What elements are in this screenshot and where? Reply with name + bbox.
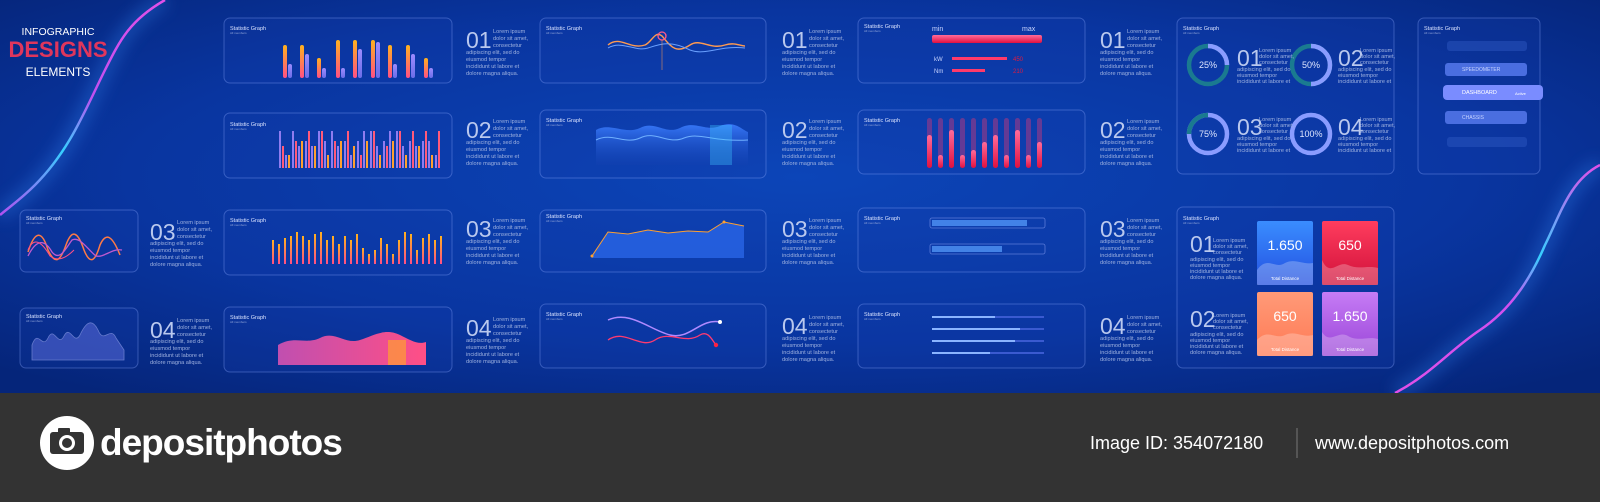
text block B4: incididunt ut labore et	[466, 352, 520, 358]
panel E1: donut charts: incididunt ut labore et	[1338, 148, 1392, 154]
panel A3: line chart: Statistic Graph	[26, 216, 62, 222]
panel D1: min/max bars: max	[1022, 26, 1036, 33]
panel E2: metric cards: dolore magna aliqua.	[1190, 275, 1243, 281]
panel F1: menu: All members	[1424, 31, 1441, 35]
panel C3: area line chart: All members	[546, 219, 563, 223]
text block A3: eiusmod tempor	[150, 248, 190, 254]
text block D2	[1100, 117, 1163, 167]
panel B4: pink area chart	[224, 307, 452, 372]
panel E2: metric cards: 02	[1190, 306, 1216, 332]
panel F1: menu	[1418, 18, 1543, 174]
footer logo: depositphotos	[100, 422, 342, 463]
panel B2: dense bar chart: All members	[230, 127, 247, 131]
text block B4: dolor sit amet,	[493, 324, 529, 330]
panel E2: metric cards: dolor sit amet,	[1213, 244, 1249, 250]
text block B1: dolore magna aliqua.	[466, 71, 519, 77]
text block C4: dolor sit amet,	[809, 322, 845, 328]
text block C1: 01	[782, 27, 808, 53]
panel E2: metric cards: incididunt ut labore et	[1190, 269, 1244, 275]
text block D1: incididunt ut labore et	[1100, 64, 1154, 70]
text block A4: adipiscing elit, sed do	[150, 339, 204, 345]
text block D1: 01	[1100, 27, 1126, 53]
text block D4: adipiscing elit, sed do	[1100, 336, 1154, 342]
text block C3: Lorem ipsum	[809, 218, 842, 224]
text block C4: consectetur	[809, 329, 838, 335]
panel E1: donut charts: adipiscing elit, sed do	[1237, 67, 1290, 73]
text block D2: eiusmod tempor	[1100, 147, 1140, 153]
panel E1: donut charts: eiusmod tempor	[1237, 142, 1277, 148]
text block B4: Lorem ipsum	[493, 317, 526, 323]
text block B1: consectetur	[493, 43, 522, 49]
panel E1: donut charts: incididunt ut labore et	[1237, 79, 1291, 85]
panel B2: dense bar chart	[224, 113, 452, 178]
panel B1: grouped bar chart: Statistic Graph	[230, 26, 266, 32]
panel E1: donut charts: dolor sit amet,	[1360, 123, 1396, 129]
text block C3: 03	[782, 216, 808, 242]
text block C2: adipiscing elit, sed do	[782, 140, 836, 146]
footer bar	[0, 393, 1600, 502]
panel E2: metric cards: 650	[1273, 308, 1297, 324]
text block C1: Lorem ipsum	[809, 29, 842, 35]
panel E2: metric cards: 1.650	[1332, 308, 1368, 324]
panel B3: thin bar chart: All members	[230, 223, 247, 227]
panel E1: donut charts: adipiscing elit, sed do	[1338, 136, 1392, 142]
text block D3: eiusmod tempor	[1100, 246, 1140, 252]
text block D4: eiusmod tempor	[1100, 343, 1140, 349]
panel E1: donut charts: eiusmod tempor	[1338, 73, 1378, 79]
text block C4: dolore magna aliqua.	[782, 357, 835, 363]
panel B1: grouped bar chart: All members	[230, 31, 247, 35]
panel B4: pink area chart: All members	[230, 320, 247, 324]
right wave	[1395, 165, 1600, 393]
panel E1: donut charts: 100%	[1299, 129, 1323, 139]
text block B3: incididunt ut labore et	[466, 253, 520, 259]
text block C3: eiusmod tempor	[782, 246, 822, 252]
text block C4: Lorem ipsum	[809, 315, 842, 321]
panel E2: metric cards: Total Distance	[1271, 276, 1300, 281]
panel D1: min/max bars: All members	[864, 29, 881, 33]
panel E1: donut charts: consectetur	[1360, 129, 1389, 135]
panel D3: progress bars: Statistic Graph	[864, 216, 900, 222]
text block C1: dolore magna aliqua.	[782, 71, 835, 77]
text block C2	[782, 117, 845, 167]
panel E1: donut charts: 03	[1237, 114, 1263, 140]
title: ELEMENTS	[26, 65, 90, 79]
panel E1: donut charts: consectetur	[1259, 60, 1288, 66]
text block D2: dolor sit amet,	[1127, 126, 1163, 132]
panel E1: donut charts: Lorem ipsum	[1360, 117, 1393, 123]
text block B1: dolor sit amet,	[493, 36, 529, 42]
panel D1: min/max bars: min	[932, 26, 943, 33]
text block B3: consectetur	[493, 232, 522, 238]
text block A3	[150, 219, 213, 268]
text block D4: Lorem ipsum	[1127, 315, 1160, 321]
panel B1: grouped bar chart	[224, 18, 452, 83]
text block B3: 03	[466, 216, 492, 242]
text block A4: incididunt ut labore et	[150, 353, 204, 359]
text block A3: consectetur	[177, 234, 206, 240]
panel C1: line chart with marker: All members	[546, 31, 563, 35]
text block C3: dolor sit amet,	[809, 225, 845, 231]
panel E1: donut charts: All members	[1183, 31, 1200, 35]
text block A3: incididunt ut labore et	[150, 255, 204, 261]
text block D4: 04	[1100, 313, 1126, 339]
panel E1: donut charts: incididunt ut labore et	[1338, 79, 1392, 85]
panel E2: metric cards: 650	[1338, 237, 1362, 253]
text block D4: consectetur	[1127, 329, 1156, 335]
text block B2: dolore magna aliqua.	[466, 161, 519, 167]
panel C3: area line chart	[540, 210, 766, 272]
footer url: www.depositphotos.com	[1314, 433, 1509, 453]
panel D1: min/max bars: kW	[934, 57, 943, 63]
text block B3: Lorem ipsum	[493, 218, 526, 224]
text block D1: adipiscing elit, sed do	[1100, 50, 1154, 56]
panel E1: donut charts: adipiscing elit, sed do	[1237, 136, 1290, 142]
text block D3: dolore magna aliqua.	[1100, 260, 1153, 266]
text block D2: adipiscing elit, sed do	[1100, 140, 1154, 146]
text block D3: 03	[1100, 216, 1126, 242]
text block C2: incididunt ut labore et	[782, 154, 836, 160]
panel E1: donut charts: Statistic Graph	[1183, 26, 1219, 32]
title	[8, 26, 108, 79]
text block D2: 02	[1100, 117, 1126, 143]
panel E2: metric cards: Lorem ipsum	[1213, 313, 1246, 319]
text block D1: eiusmod tempor	[1100, 57, 1140, 63]
panel E2: metric cards: Total Distance	[1271, 347, 1300, 352]
panel E2: metric cards: adipiscing elit, sed do	[1190, 332, 1244, 338]
panel C2: blue area chart: Statistic Graph	[546, 118, 582, 124]
text block B3: dolor sit amet,	[493, 225, 529, 231]
text block C1: incididunt ut labore et	[782, 64, 836, 70]
panel E1: donut charts: 04	[1338, 114, 1364, 140]
text block C1: dolor sit amet,	[809, 36, 845, 42]
panel E1: donut charts: dolor sit amet,	[1259, 54, 1295, 60]
text block B4: consectetur	[493, 331, 522, 337]
text block C1	[782, 27, 845, 77]
text block B4	[466, 315, 529, 365]
text block B2: 02	[466, 117, 492, 143]
text block A3: dolor sit amet,	[177, 227, 213, 233]
panel B3: thin bar chart: Statistic Graph	[230, 218, 266, 224]
title: INFOGRAPHIC	[22, 26, 95, 38]
panel E2: metric cards: consectetur	[1213, 325, 1242, 331]
text block B4: adipiscing elit, sed do	[466, 338, 520, 344]
footer image id: Image ID: 354072180	[1090, 433, 1263, 453]
panel C3: area line chart: Statistic Graph	[546, 214, 582, 220]
panel D1: min/max bars: Nm	[934, 69, 943, 75]
panel E1: donut charts: Lorem ipsum	[1259, 48, 1292, 54]
panel E1: donut charts	[1177, 18, 1396, 174]
panel B4: pink area chart: Statistic Graph	[230, 315, 266, 321]
text block C4: eiusmod tempor	[782, 343, 822, 349]
text block B4: dolore magna aliqua.	[466, 359, 519, 365]
panel E2: metric cards: Statistic Graph	[1183, 216, 1219, 222]
text block C3: consectetur	[809, 232, 838, 238]
text block B4: 04	[466, 315, 492, 341]
panel E2: metric cards: Lorem ipsum	[1213, 238, 1246, 244]
text block D1: dolor sit amet,	[1127, 36, 1163, 42]
panel E2: metric cards: consectetur	[1213, 250, 1242, 256]
panel E1: donut charts: 02	[1338, 45, 1364, 71]
panel E1: donut charts: 25%	[1199, 60, 1217, 70]
panel E2: metric cards: 01	[1190, 231, 1216, 257]
text block A3: 03	[150, 219, 176, 245]
panel E2: metric cards: incididunt ut labore et	[1190, 344, 1244, 350]
text block C4: incididunt ut labore et	[782, 350, 836, 356]
panel E2: metric cards: adipiscing elit, sed do	[1190, 257, 1244, 263]
footer logo	[40, 416, 342, 470]
panel C4: two curves: Statistic Graph	[546, 312, 582, 318]
text block B1: eiusmod tempor	[466, 57, 506, 63]
panel C1: line chart with marker	[540, 18, 766, 83]
panel A3: line chart: All members	[26, 221, 43, 225]
panel F1: menu: CHASSIS	[1462, 115, 1485, 121]
text block A4: 04	[150, 317, 176, 343]
panel F1: menu: Statistic Graph	[1424, 26, 1460, 32]
text block A4: Lorem ipsum	[177, 318, 210, 324]
panel E2: metric cards: dolore magna aliqua.	[1190, 350, 1243, 356]
panel F1: menu: DASHBOARD	[1462, 90, 1497, 96]
text block B1: Lorem ipsum	[493, 29, 526, 35]
text block C2: Lorem ipsum	[809, 119, 842, 125]
text block B3: adipiscing elit, sed do	[466, 239, 520, 245]
panel C4: two curves: All members	[546, 317, 563, 321]
panel E2: metric cards: All members	[1183, 221, 1200, 225]
panel D1: min/max bars: Statistic Graph	[864, 24, 900, 30]
panel D4: line bars: Statistic Graph	[864, 312, 900, 318]
text block B3	[466, 216, 529, 266]
text block D4: dolor sit amet,	[1127, 322, 1163, 328]
panel E1: donut charts: 75%	[1199, 129, 1217, 139]
panel E1: donut charts: eiusmod tempor	[1338, 142, 1378, 148]
panel F1: menu: SPEEDOMETER	[1462, 67, 1501, 73]
panel A4: area chart: All members	[26, 319, 43, 323]
panel B3: thin bar chart	[224, 210, 452, 275]
text block C3: adipiscing elit, sed do	[782, 239, 836, 245]
panel D2: vertical red bars	[858, 110, 1085, 174]
panel F1: menu: Active	[1515, 91, 1527, 96]
text block D1: dolore magna aliqua.	[1100, 71, 1153, 77]
text block C3	[782, 216, 845, 266]
text block B2: consectetur	[493, 133, 522, 139]
panel E1: donut charts: adipiscing elit, sed do	[1338, 67, 1392, 73]
panel D4: line bars: All members	[864, 317, 881, 321]
panel D2: vertical red bars: All members	[864, 123, 881, 127]
panel E1: donut charts: consectetur	[1259, 129, 1288, 135]
panel E1: donut charts: Lorem ipsum	[1259, 117, 1292, 123]
text block B1	[466, 27, 529, 77]
text block B1: adipiscing elit, sed do	[466, 50, 520, 56]
panel A4: area chart: Statistic Graph	[26, 314, 62, 320]
panel E1: donut charts: dolor sit amet,	[1259, 123, 1295, 129]
text block B1: incididunt ut labore et	[466, 64, 520, 70]
panel E2: metric cards: eiusmod tempor	[1190, 263, 1230, 269]
text block A4: dolore magna aliqua.	[150, 360, 203, 366]
panel E2: metric cards: dolor sit amet,	[1213, 319, 1249, 325]
panel D1: min/max bars	[858, 18, 1085, 83]
panel D1: min/max bars: 210	[1013, 69, 1024, 75]
panel D4: line bars	[858, 304, 1085, 368]
text block C2: dolor sit amet,	[809, 126, 845, 132]
panel E1: donut charts: 01	[1237, 45, 1263, 71]
text block D1: Lorem ipsum	[1127, 29, 1160, 35]
text block C1: adipiscing elit, sed do	[782, 50, 836, 56]
text block D4: dolore magna aliqua.	[1100, 357, 1153, 363]
panel C2: blue area chart	[540, 110, 766, 178]
panel C4: two curves	[540, 304, 766, 368]
text block A4: consectetur	[177, 332, 206, 338]
panel A4: area chart	[20, 308, 138, 368]
text block A3: dolore magna aliqua.	[150, 262, 203, 268]
text block A3: adipiscing elit, sed do	[150, 241, 204, 247]
text block A4	[150, 317, 213, 366]
text block D3: incididunt ut labore et	[1100, 253, 1154, 259]
panel E1: donut charts: Lorem ipsum	[1360, 48, 1393, 54]
text block B2: dolor sit amet,	[493, 126, 529, 132]
text block A3: Lorem ipsum	[177, 220, 210, 226]
panel D3: progress bars	[858, 208, 1085, 272]
panel E2: metric cards: Total Distance	[1336, 276, 1365, 281]
background	[0, 0, 1600, 393]
text block B2	[466, 117, 529, 167]
text block A4: eiusmod tempor	[150, 346, 190, 352]
text block C4: 04	[782, 313, 808, 339]
panel D1: min/max bars: 450	[1013, 57, 1024, 63]
panel C2: blue area chart: All members	[546, 123, 563, 127]
text block A4: dolor sit amet,	[177, 325, 213, 331]
panel E1: donut charts: 50%	[1302, 60, 1320, 70]
panel E2: metric cards: Total Distance	[1336, 347, 1365, 352]
text block C3: incididunt ut labore et	[782, 253, 836, 259]
text block C4	[782, 313, 845, 363]
text block C3: dolore magna aliqua.	[782, 260, 835, 266]
text block D2: dolore magna aliqua.	[1100, 161, 1153, 167]
text block D1	[1100, 27, 1163, 77]
panel E2: metric cards: eiusmod tempor	[1190, 338, 1230, 344]
text block D3: adipiscing elit, sed do	[1100, 239, 1154, 245]
text block B2: adipiscing elit, sed do	[466, 140, 520, 146]
text block B3: eiusmod tempor	[466, 246, 506, 252]
text block B3: dolore magna aliqua.	[466, 260, 519, 266]
left wave	[0, 0, 165, 215]
text block C2: 02	[782, 117, 808, 143]
text block C2: consectetur	[809, 133, 838, 139]
panel D3: progress bars: All members	[864, 221, 881, 225]
text block D1: consectetur	[1127, 43, 1156, 49]
title: DESIGNS	[8, 37, 108, 62]
text block B2: incididunt ut labore et	[466, 154, 520, 160]
text block D2: Lorem ipsum	[1127, 119, 1160, 125]
panel E1: donut charts: eiusmod tempor	[1237, 73, 1277, 79]
panel E1: donut charts: incididunt ut labore et	[1237, 148, 1291, 154]
panel B2: dense bar chart: Statistic Graph	[230, 122, 266, 128]
text block B4: eiusmod tempor	[466, 345, 506, 351]
text block C4: adipiscing elit, sed do	[782, 336, 836, 342]
text block B2: eiusmod tempor	[466, 147, 506, 153]
text block D2: consectetur	[1127, 133, 1156, 139]
panel E1: donut charts: consectetur	[1360, 60, 1389, 66]
text block D3: dolor sit amet,	[1127, 225, 1163, 231]
panel A3: line chart	[20, 210, 138, 272]
text block B1: 01	[466, 27, 492, 53]
panel C1: line chart with marker: Statistic Graph	[546, 26, 582, 32]
text block D4	[1100, 313, 1163, 363]
panel D2: vertical red bars: Statistic Graph	[864, 118, 900, 124]
text block B2: Lorem ipsum	[493, 119, 526, 125]
panel E2: metric cards: 1.650	[1267, 237, 1303, 253]
text block D2: incididunt ut labore et	[1100, 154, 1154, 160]
text block D3: Lorem ipsum	[1127, 218, 1160, 224]
text block D3: consectetur	[1127, 232, 1156, 238]
panel E2: metric cards	[1177, 207, 1394, 368]
text block C2: dolore magna aliqua.	[782, 161, 835, 167]
text block C1: consectetur	[809, 43, 838, 49]
text block C2: eiusmod tempor	[782, 147, 822, 153]
text block D4: incididunt ut labore et	[1100, 350, 1154, 356]
panel E1: donut charts: dolor sit amet,	[1360, 54, 1396, 60]
text block C1: eiusmod tempor	[782, 57, 822, 63]
text block D3	[1100, 216, 1163, 266]
